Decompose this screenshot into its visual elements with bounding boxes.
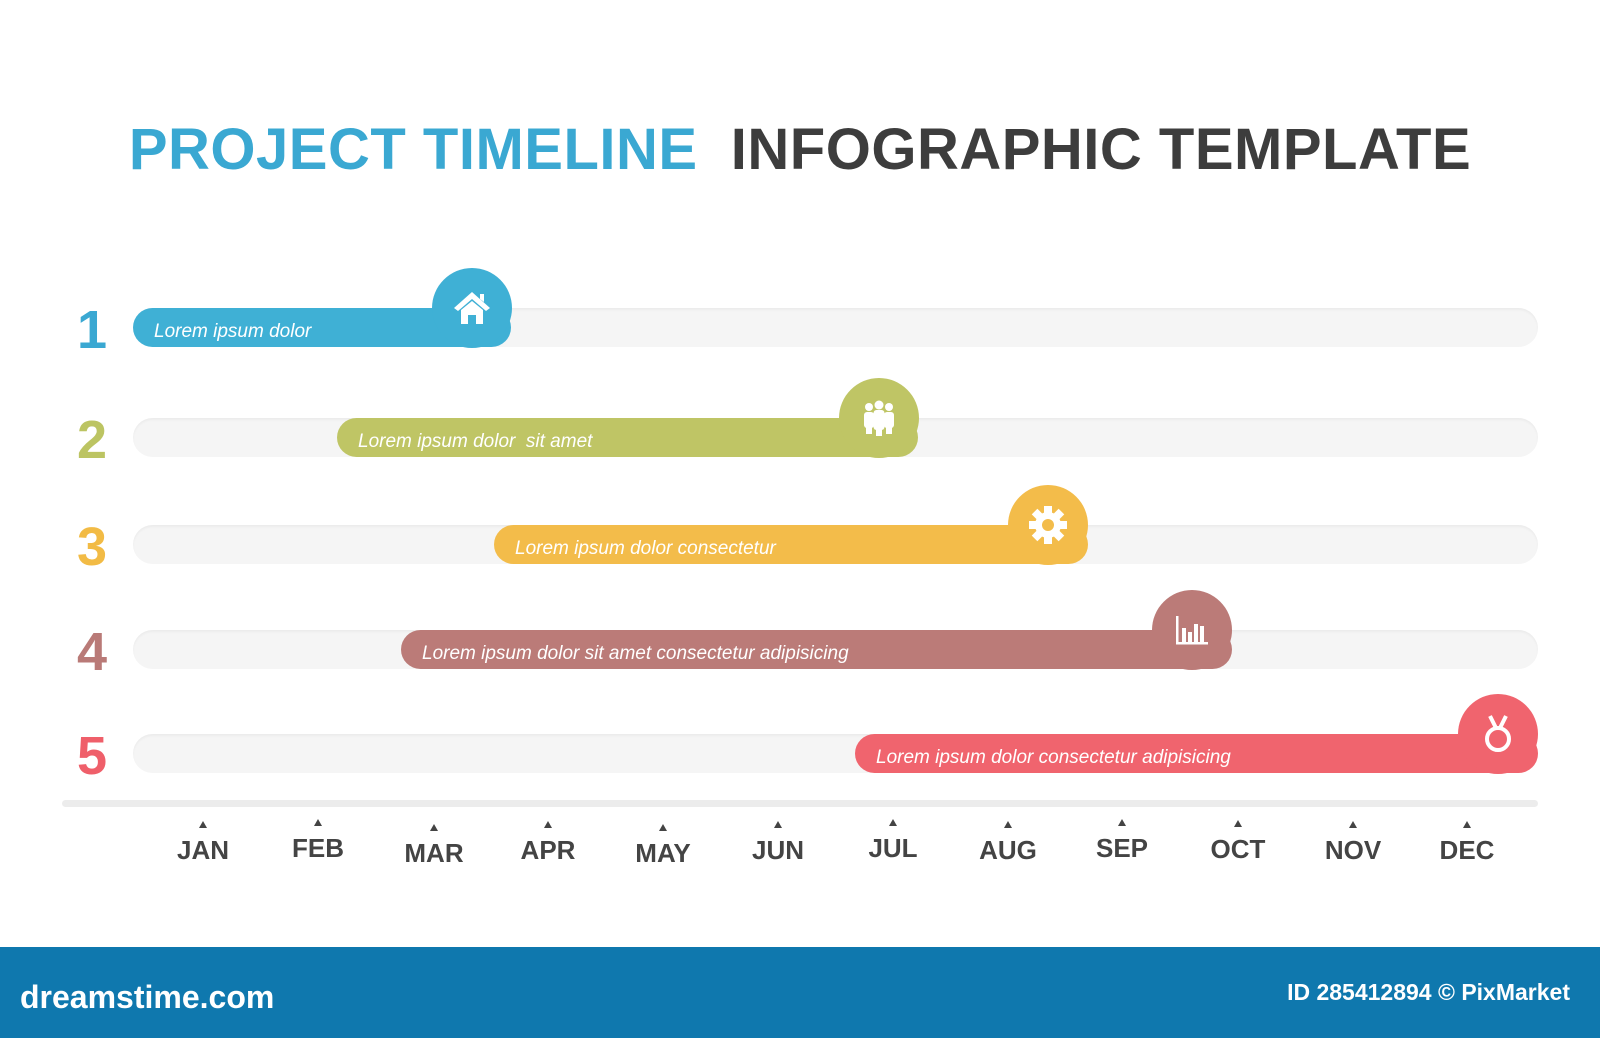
bar 5: Lorem ipsum dolor consectetur adipisicing bbox=[876, 747, 1231, 768]
month labels: JAN bbox=[177, 835, 229, 865]
footer logo text: dreamstime.com bbox=[20, 979, 274, 1015]
bar 4 bbox=[401, 590, 1232, 670]
bar 5 bbox=[855, 694, 1538, 774]
month labels: JUN bbox=[752, 835, 804, 865]
bar 2: Lorem ipsum dolor sit amet bbox=[358, 431, 592, 452]
number 3: 3 bbox=[77, 517, 107, 577]
number 2: 2 bbox=[77, 410, 107, 470]
bar 3: Lorem ipsum dolor consectetur bbox=[515, 538, 776, 559]
title: PROJECT TIMELINE INFOGRAPHIC TEMPLATE bbox=[129, 117, 1471, 182]
month labels bbox=[177, 819, 1494, 868]
bar 3 bbox=[494, 485, 1088, 565]
month labels: SEP bbox=[1096, 833, 1148, 863]
track rows bbox=[133, 308, 1538, 773]
month labels: MAR bbox=[404, 838, 464, 868]
icon: gear bbox=[1008, 485, 1088, 565]
number 1: 1 bbox=[77, 300, 107, 360]
icon: people bbox=[839, 378, 919, 458]
number 4: 4 bbox=[77, 622, 107, 682]
month labels: JUL bbox=[868, 833, 918, 863]
footer bbox=[0, 947, 1600, 1038]
icon: house bbox=[432, 268, 512, 348]
bar 1 bbox=[133, 268, 512, 348]
month labels: OCT bbox=[1211, 834, 1265, 864]
month labels: DEC bbox=[1440, 835, 1494, 865]
month labels: MAY bbox=[635, 838, 691, 868]
month labels: APR bbox=[521, 835, 575, 865]
number 5: 5 bbox=[77, 726, 107, 786]
bar 4: Lorem ipsum dolor sit amet consectetur adipisicing bbox=[422, 643, 849, 664]
month labels: NOV bbox=[1325, 835, 1381, 865]
month labels: FEB bbox=[292, 833, 344, 863]
axis line bbox=[62, 800, 1538, 807]
bar 2 bbox=[337, 378, 919, 458]
icon: bar chart bbox=[1152, 590, 1232, 670]
footer id text: ID 285412894 © PixMarket bbox=[1287, 979, 1570, 1005]
month labels: AUG bbox=[979, 835, 1037, 865]
bar 1: Lorem ipsum dolor bbox=[154, 321, 311, 342]
icon: medal bbox=[1458, 694, 1538, 774]
